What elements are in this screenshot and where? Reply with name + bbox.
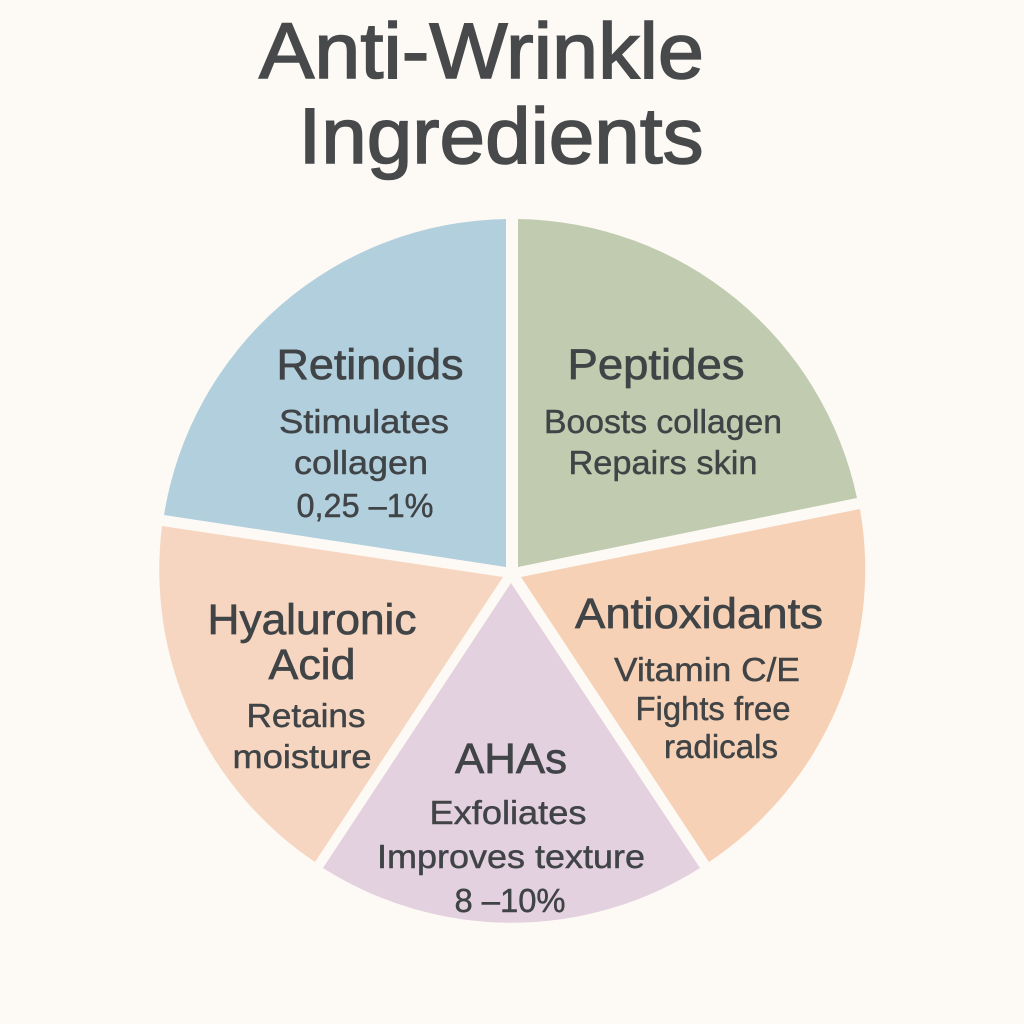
panel: AHAs xyxy=(323,583,700,923)
panel: AHAs: AHAs xyxy=(455,735,567,783)
panel: peptides: Boosts collagen xyxy=(544,403,782,440)
pie chart xyxy=(159,219,865,923)
panel: AHAs: Exfoliates xyxy=(430,794,586,831)
panel: antioxidants: Vitamin C/E xyxy=(614,651,800,688)
panel: peptides: Peptides xyxy=(568,341,744,389)
panel: retinoids: 0,25 –1% xyxy=(296,487,434,524)
title: Ingredients xyxy=(298,91,704,180)
panel: hyaluronic acid: Hyaluronic xyxy=(208,596,416,644)
panel: AHAs: Improves texture xyxy=(377,838,645,875)
panel: AHAs: 8 –10% xyxy=(454,882,566,919)
panel: retinoids: collagen xyxy=(294,444,428,481)
title: Anti-Wrinkle xyxy=(259,6,704,95)
panel: hyaluronic acid xyxy=(159,526,503,862)
panel: retinoids: Stimulates xyxy=(279,403,449,440)
panel: hyaluronic acid: moisture xyxy=(232,738,372,775)
panel: peptides xyxy=(518,219,857,567)
panel: retinoids: Retinoids xyxy=(276,341,464,389)
panel: hyaluronic acid: Retains xyxy=(246,697,366,734)
panel: peptides: Repairs skin xyxy=(568,444,758,481)
title xyxy=(259,6,704,180)
panel: antioxidants: Fights free xyxy=(636,690,790,727)
panel: hyaluronic acid: Acid xyxy=(268,641,356,689)
panel: retinoids xyxy=(164,219,506,567)
panel: antioxidants xyxy=(521,509,865,862)
panel: antioxidants: radicals xyxy=(664,728,778,765)
panel: antioxidants: Antioxidants xyxy=(575,590,823,638)
